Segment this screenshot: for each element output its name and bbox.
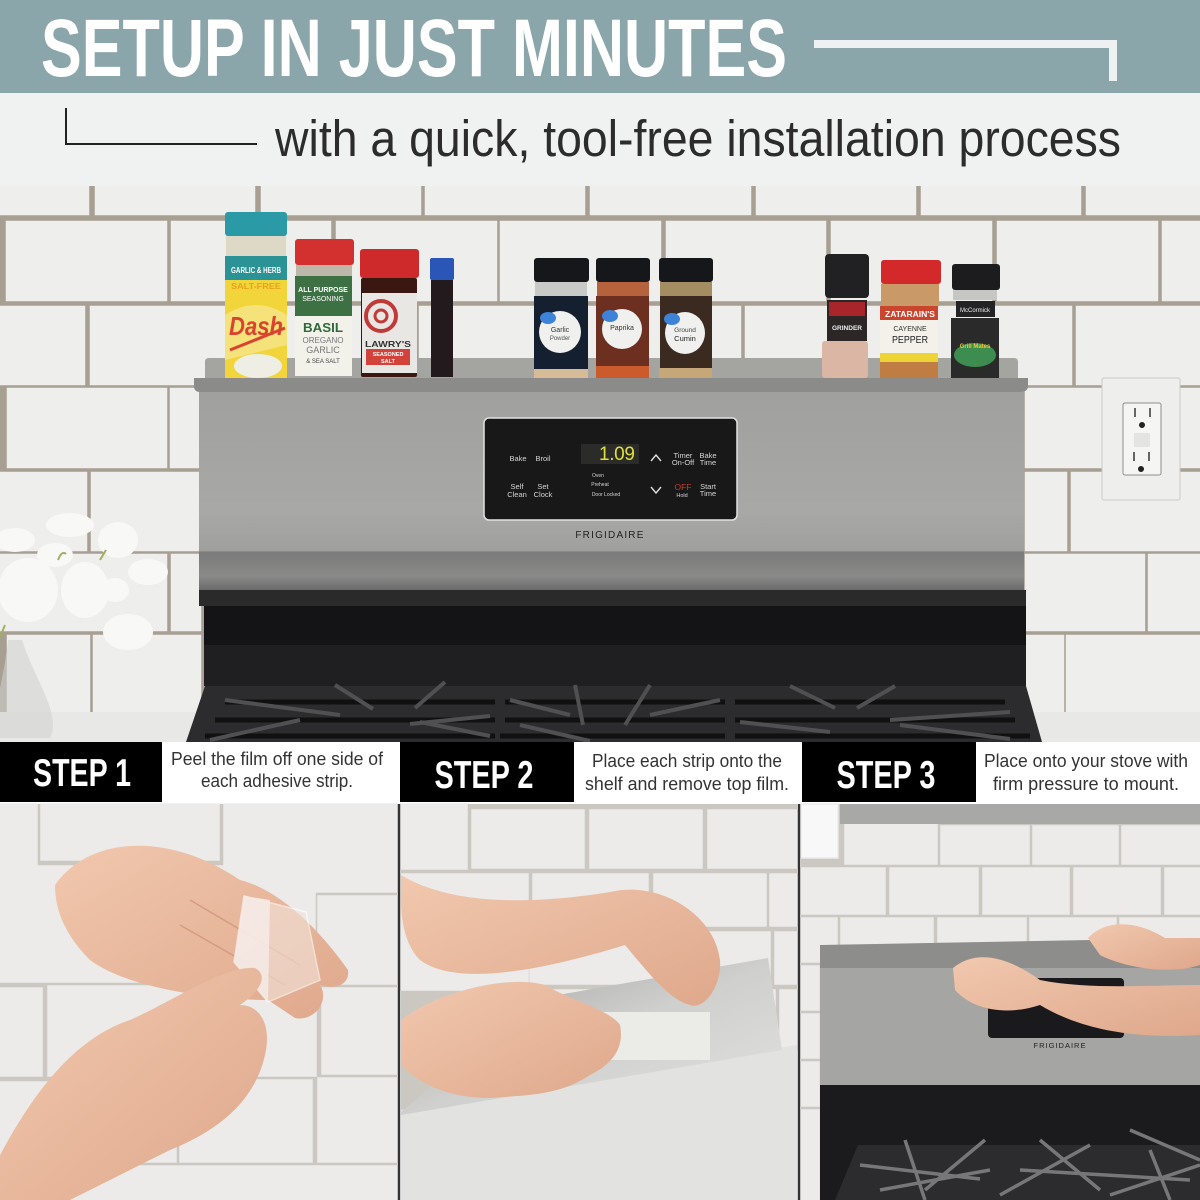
step 2: STEP 2 xyxy=(434,754,534,797)
jar: Basil: GARLIC xyxy=(306,345,340,355)
jar: McCormick: Grill Mates xyxy=(960,344,991,350)
step 1: Peel the film off one side of xyxy=(171,749,384,769)
control panel: Time xyxy=(700,489,716,498)
main kitchen photo xyxy=(0,186,1200,742)
counter xyxy=(0,712,1200,742)
step 2: Place each strip onto the xyxy=(592,751,782,771)
arm and hand upper xyxy=(401,875,720,1006)
control panel xyxy=(988,978,1124,1038)
shelf held in hands xyxy=(401,958,782,1115)
arm and hand lower xyxy=(401,982,621,1098)
jar: Mrs Dash: GARLIC & HERB xyxy=(231,266,281,275)
control panel: Set xyxy=(537,482,550,491)
jar: Basil: & SEA SALT xyxy=(306,359,340,365)
control panel: 1.09 xyxy=(599,444,635,465)
top bracket xyxy=(814,44,1113,81)
jar: Basil: SEASONING xyxy=(302,296,344,303)
steps bar xyxy=(0,742,1200,802)
stove xyxy=(186,358,1042,742)
shelf xyxy=(194,358,1028,392)
jar: Paprika xyxy=(596,258,650,378)
control panel: Timer xyxy=(674,451,693,460)
jar: Lawry's: LAWRY'S xyxy=(365,339,411,349)
adhesive strip xyxy=(234,896,320,1002)
subtitle band xyxy=(0,93,1200,186)
header band xyxy=(0,0,1200,94)
jar: Basil xyxy=(295,239,354,376)
brand: FRIGIDAIRE xyxy=(1034,1041,1086,1050)
jar: Basil: OREGANO xyxy=(303,336,343,345)
photo: step 2 xyxy=(401,804,797,1200)
jar: salt grinder: GRINDER xyxy=(832,325,862,332)
control panel: OFF xyxy=(674,482,692,492)
jar: Zatarain's xyxy=(880,260,941,378)
step 2: shelf and remove top film. xyxy=(585,774,789,794)
panel dividers xyxy=(399,804,799,1200)
jar: Lawry's xyxy=(360,249,419,377)
jar: Basil: ALL PURPOSE xyxy=(298,287,348,294)
vial xyxy=(430,258,454,377)
subtitle: with a quick, tool-free installation process xyxy=(274,110,1121,167)
control panel: On-Off xyxy=(672,458,695,467)
jar: Cumin xyxy=(659,258,713,378)
shelf xyxy=(820,940,1200,968)
jar: Zatarain's: CAYENNE xyxy=(893,326,927,333)
wall outlet xyxy=(1102,378,1180,500)
title: SETUP IN JUST MINUTES xyxy=(41,3,787,94)
jar: Mrs Dash xyxy=(225,212,287,378)
jar: Garlic: Garlic xyxy=(551,327,570,334)
jar: Lawry's: SALT xyxy=(381,359,396,365)
jar: Garlic: Powder xyxy=(550,336,570,342)
stainless back panel xyxy=(199,392,1024,590)
jar: Zatarain's: PEPPER xyxy=(892,334,928,346)
cooktop xyxy=(186,590,1042,742)
counter surface xyxy=(401,1045,797,1200)
stove back xyxy=(820,965,1200,1085)
step 3: firm pressure to mount. xyxy=(993,774,1179,794)
photo: step 3 xyxy=(801,804,1200,1200)
upper hand xyxy=(55,846,348,1018)
control panel: Clock xyxy=(534,490,553,499)
jar: Paprika: Paprika xyxy=(610,325,634,332)
step 1: STEP 1 xyxy=(33,752,131,795)
control panel: Oven xyxy=(592,473,604,479)
flowers and vase xyxy=(0,513,168,738)
control panel: Clean xyxy=(507,490,527,499)
cooktop xyxy=(820,1085,1200,1200)
brand: FRIGIDAIRE xyxy=(575,530,645,541)
jar: Basil: BASIL xyxy=(303,320,343,335)
step 2 xyxy=(400,742,789,802)
jar: Cumin: Ground xyxy=(674,327,696,334)
control panel: Self xyxy=(511,482,524,491)
forearm upper xyxy=(1088,924,1200,970)
range hood xyxy=(840,804,1200,824)
photo: step 1 xyxy=(0,804,397,1200)
control panel: Door Locked xyxy=(592,492,620,498)
control panel: Bake xyxy=(509,454,527,463)
spice jars xyxy=(225,212,1000,378)
jar: Mrs Dash: SALT-FREE xyxy=(231,282,282,291)
control panel: Time xyxy=(700,458,716,467)
step 3: STEP 3 xyxy=(836,754,936,797)
jar: Zatarain's: ZATARAIN'S xyxy=(885,310,936,319)
control panel: Broil xyxy=(535,454,551,463)
control panel xyxy=(484,418,737,520)
control panel: Bake xyxy=(699,451,717,460)
lower bracket xyxy=(66,108,257,144)
jar: Lawry's: SEASONED xyxy=(373,352,403,358)
jar: Mrs Dash: Dash xyxy=(229,311,283,341)
forearm lower xyxy=(953,957,1200,1036)
step 1 xyxy=(0,742,384,802)
jar: salt grinder xyxy=(822,254,869,378)
control panel: Start xyxy=(700,482,717,491)
lower hand xyxy=(0,968,267,1200)
jar: Garlic xyxy=(534,258,589,378)
control panel: Hold xyxy=(676,493,688,499)
jar: Cumin: Cumin xyxy=(674,334,696,343)
jar: McCormick xyxy=(951,264,1000,378)
jar: McCormick: McCormick xyxy=(960,308,991,314)
step 3: Place onto your stove with xyxy=(984,751,1188,771)
control panel: Preheat xyxy=(591,482,609,488)
step 1: each adhesive strip. xyxy=(201,771,353,791)
step 3 xyxy=(802,742,1188,802)
